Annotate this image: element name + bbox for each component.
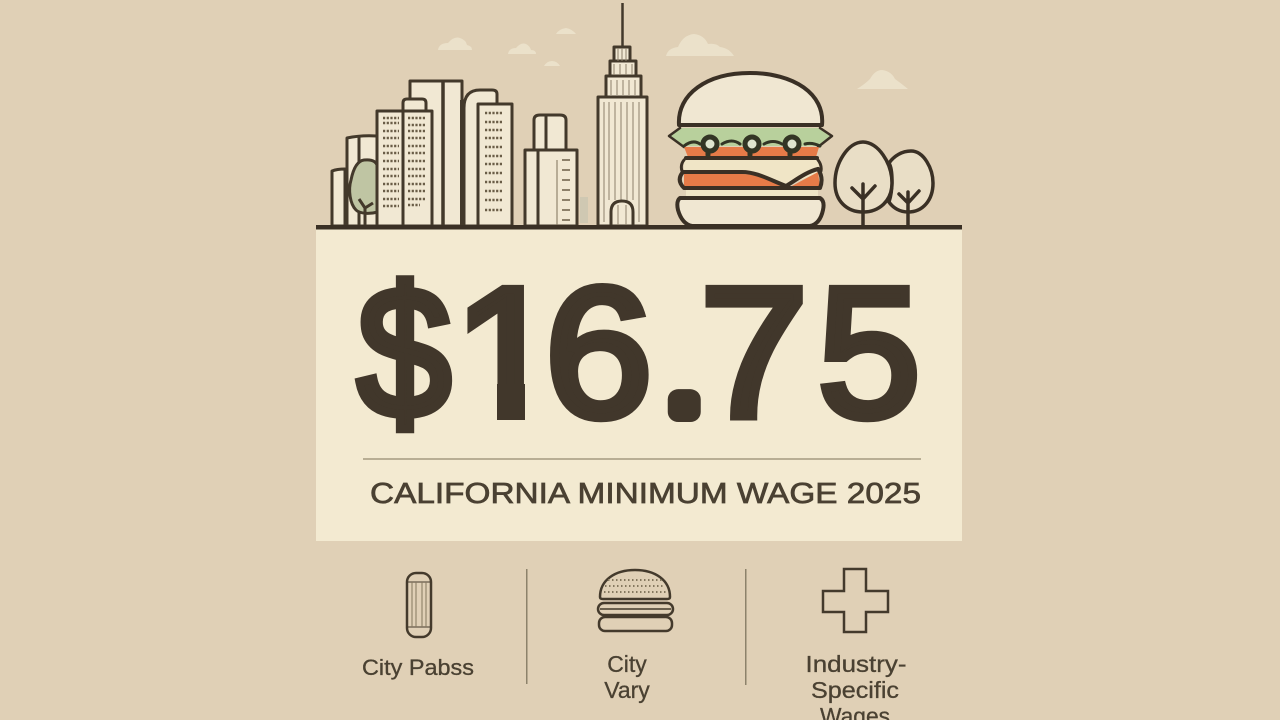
clouds — [438, 28, 908, 89]
lettuce — [669, 128, 832, 146]
foot mask for the one — [462, 394, 566, 430]
label: industry-specific wages: Industry- — [806, 651, 906, 677]
digit: six: 6 — [545, 249, 652, 455]
building: distant grey block — [580, 197, 588, 223]
building: art deco skyscraper — [598, 3, 647, 226]
separator — [526, 569, 528, 684]
label: city vary: City — [607, 651, 647, 677]
column: city vary — [598, 570, 673, 703]
divider rule — [363, 458, 921, 460]
burger illustration — [669, 73, 832, 226]
tree: green — [350, 160, 378, 226]
separator — [745, 569, 746, 685]
trees — [835, 142, 933, 227]
digit: seven: 7 — [700, 249, 808, 455]
caption: CALIFORNIA MINIMUM WAGE 2025 — [370, 478, 921, 510]
wage figure — [358, 249, 920, 456]
icon: burger — [598, 570, 673, 631]
building: stepped tower — [525, 115, 577, 226]
icon: plus — [823, 569, 888, 632]
column: industry wages — [806, 569, 906, 720]
patty — [684, 172, 820, 187]
stem base of the one — [497, 384, 525, 420]
label: city pass: City Pabss — [362, 655, 474, 680]
cheese layer — [684, 160, 820, 186]
digit: five: 5 — [818, 249, 920, 455]
cheese slice — [683, 169, 818, 186]
skyline — [332, 3, 647, 226]
building: curved tower — [462, 90, 512, 226]
building: windowed tower — [377, 99, 432, 226]
lettuce edge and olives — [684, 137, 820, 155]
building: tall slab behind — [410, 81, 462, 226]
label: industry-specific wages — [806, 651, 906, 720]
digit: dollar: $ — [358, 251, 451, 456]
tree: back — [889, 151, 933, 227]
ground line — [316, 225, 962, 230]
lower layer — [686, 190, 818, 196]
tomato — [684, 147, 819, 157]
label: city vary: Vary — [604, 677, 650, 703]
digit: one: 1 — [454, 249, 561, 455]
decimal point: . — [667, 305, 702, 438]
bottom bun — [677, 198, 824, 226]
column: city pass — [362, 573, 474, 680]
panel: wage card — [316, 228, 962, 541]
top bun — [679, 73, 822, 125]
building: far left low blocks — [332, 136, 377, 226]
tree: front — [835, 142, 892, 227]
icon: capsule — [407, 573, 431, 637]
label: industry-specific wages: Specific — [811, 677, 899, 703]
